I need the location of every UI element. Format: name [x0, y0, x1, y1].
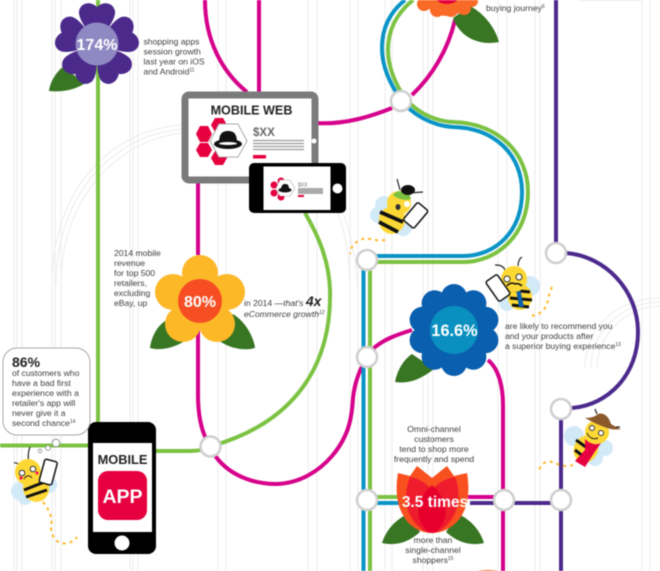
text: recommend: 13 [615, 342, 621, 348]
text: 2014 mobile revenue: eBay, up [114, 298, 148, 308]
text: 4x eCommerce growth: eCommerce growth [244, 309, 319, 319]
tulip 3.5 times: 3.5 times [402, 494, 468, 511]
tulip 3.5 times [382, 466, 484, 544]
text: 2014 mobile revenue [114, 248, 161, 308]
route: green line down to mobile app [0, 0, 98, 446]
text: shopping apps: last year on iOS [144, 56, 205, 66]
text: omni-channel: frequently and spend [394, 454, 474, 464]
bee with mustache and tie [485, 257, 540, 311]
text: more than single-channel: shoppers [413, 555, 448, 565]
sad bee with phone [11, 447, 58, 505]
blue flower 16.6% [395, 284, 498, 382]
thought bubble 86%: never give it a [12, 408, 66, 418]
phone: mobile web [249, 163, 346, 213]
bottom flower edge [474, 570, 502, 571]
text: buying journey: buying journey [486, 3, 542, 13]
text: 2014 mobile revenue: for top 500 [114, 268, 155, 278]
route: magenta line from tablet to top flower [316, 20, 455, 123]
tablet: mobile web: $XX [253, 127, 275, 139]
text: more than single-channel: single-channel [405, 545, 461, 555]
text: 2014 mobile revenue: excluding [114, 288, 151, 298]
text: shopping apps: session growth [144, 46, 201, 56]
station nodes [200, 91, 571, 510]
mobile app phone: APP [102, 486, 143, 508]
text: recommend: a superior buying experience [505, 341, 615, 351]
text: shopping apps: and Android [144, 66, 189, 76]
yellow flower 80%: 80% [184, 294, 216, 311]
route: green line from app to phone [150, 213, 330, 451]
thought bubble 86% [3, 348, 90, 453]
text: 4x eCommerce growth [244, 293, 325, 319]
yellow flower 80% [150, 255, 255, 349]
text: buying journey: 6 [542, 4, 545, 10]
text: 2014 mobile revenue: retailers, [114, 278, 147, 288]
thought bubble 86%: 14 [70, 419, 76, 425]
text: more than single-channel: 15 [448, 556, 454, 562]
text: omni-channel: customers [414, 434, 454, 444]
text: shopping apps: shopping apps [144, 36, 199, 46]
text: recommend: and your products after [505, 331, 594, 341]
phone: mobile web: $XX [298, 182, 308, 188]
thought bubble 86%: second chance [12, 418, 70, 428]
text: shopping apps [144, 36, 205, 76]
text: omni-channel [394, 424, 474, 464]
route: magenta connector [468, 495, 503, 499]
text: recommend: are likely to recommend you [505, 321, 613, 331]
thought bubble 86%: of customers who [12, 368, 80, 378]
mobile app phone: MOBILE [98, 452, 148, 467]
thought bubble 86%: 86% [12, 354, 41, 370]
text: more than single-channel: more than [414, 535, 453, 545]
text: 4x eCommerce growth: in 2014 —that's 4x [244, 293, 323, 309]
route: green line paired with blue [367, 0, 528, 571]
route: blue line [364, 0, 522, 571]
thought bubble 86%: retailer's app will [12, 398, 75, 408]
bee with hat and phone [370, 179, 428, 238]
bee with cowboy hat and scarf [564, 409, 621, 467]
text: omni-channel: Omni-channel [407, 424, 461, 434]
text: shopping apps: 11 [189, 68, 195, 74]
thought bubble 86%: have a bad first [12, 378, 71, 388]
text: more than single-channel [405, 535, 461, 565]
blue flower 16.6%: 16.6% [431, 322, 478, 340]
route: purple arc [566, 253, 638, 408]
text: 2014 mobile revenue: revenue [114, 258, 145, 268]
mobile app phone [88, 422, 156, 554]
text: recommend [505, 321, 621, 351]
text: omni-channel: tend to shop more [399, 444, 469, 454]
purple flower 174%: 174% [77, 37, 117, 54]
route: magenta line top vertical [257, 0, 261, 92]
route: magenta line through yellow flower [198, 180, 412, 484]
tablet: mobile web: MOBILE WEB [211, 104, 292, 118]
route: magenta line down right of blue flower [488, 360, 503, 571]
route: magenta line top left arc [205, 0, 247, 92]
purple flower 174% [49, 3, 141, 91]
route: purple main line [470, 0, 561, 571]
thought bubble 86%: experience with a [12, 388, 79, 398]
text: 2014 mobile revenue: 2014 mobile [114, 248, 161, 258]
dotted flight trails [43, 239, 573, 543]
text: 4x eCommerce growth: 12 [319, 310, 325, 316]
tablet: mobile web [185, 95, 316, 180]
top orange flower [417, 0, 499, 43]
